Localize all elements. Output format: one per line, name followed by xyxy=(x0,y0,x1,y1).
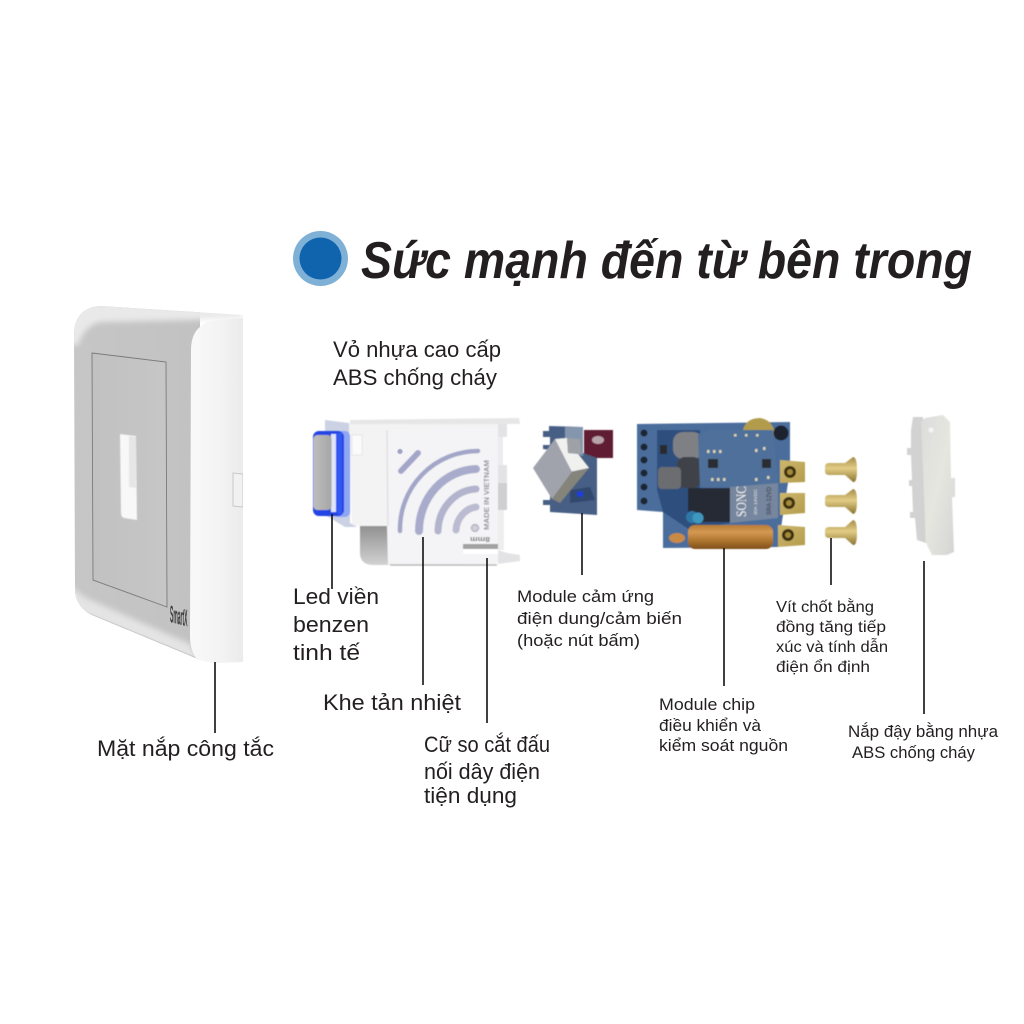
label: LED: Led viền xyxy=(293,584,379,609)
sensor LED xyxy=(577,491,583,497)
label: sensor module xyxy=(517,587,682,650)
panel: blue LED and button xyxy=(313,431,350,517)
side clip xyxy=(233,473,243,507)
plate front face xyxy=(70,300,200,670)
board chips xyxy=(708,459,771,468)
panel: back cover xyxy=(907,415,955,555)
terminals xyxy=(778,460,805,547)
label: chip module: Module chip xyxy=(659,696,755,714)
label: sensor leader line xyxy=(581,513,583,575)
dark components xyxy=(688,488,730,522)
sensor board xyxy=(543,426,597,515)
plate bottom edge xyxy=(82,612,198,660)
label: plate leader line xyxy=(214,662,216,733)
recessed panel xyxy=(92,353,167,607)
label: sensor module: (hoặc nút bấm) xyxy=(517,631,640,650)
housing main body xyxy=(348,424,498,565)
label: back cover xyxy=(848,722,999,762)
relay brand: SONC xyxy=(734,486,750,517)
label: screws: điện ổn định xyxy=(776,658,870,676)
label: vents: Khe tản nhiệt xyxy=(323,690,461,715)
label: LED leader line xyxy=(331,514,333,589)
rocker slot xyxy=(120,434,137,520)
brass screw rear xyxy=(743,418,775,436)
label: LED: tinh tế xyxy=(293,640,360,665)
housing rear clips xyxy=(498,424,520,564)
housing shoulder xyxy=(325,420,357,527)
label: wire gauge: tiện dụng xyxy=(424,783,517,808)
housing top rail xyxy=(350,418,520,426)
label: housing: Vỏ nhựa cao cấp xyxy=(333,337,501,362)
label: back cover: Nắp đậy bằng nhựa xyxy=(848,722,999,741)
label: sensor module: điện dung/cảm biến xyxy=(517,609,682,628)
main PCB xyxy=(637,422,790,548)
board holes xyxy=(640,430,648,504)
plate bottom bevel xyxy=(75,588,196,658)
top daughter board xyxy=(698,430,778,487)
icon: brass screws xyxy=(825,457,857,545)
label: chip leader line xyxy=(723,548,725,686)
plate top bevel xyxy=(74,306,243,346)
label: wire gauge xyxy=(424,732,550,808)
small orange resistor xyxy=(669,533,685,543)
label: wire gauge: nối dây điện xyxy=(424,759,540,784)
relay xyxy=(730,483,778,523)
label: cover leader line xyxy=(923,561,925,714)
label: screws: Vít chốt bằng xyxy=(776,597,874,616)
relay specs: SRA-12VD xyxy=(767,486,773,515)
panel: switch module housing xyxy=(325,418,520,565)
label: gauge leader line xyxy=(486,558,488,723)
copper capacitor xyxy=(688,525,773,549)
icon: wifi vents xyxy=(398,450,478,532)
panel: switch face plate xyxy=(70,300,243,670)
blue ceramic capacitor xyxy=(686,511,698,523)
label: screws: đồng tăng tiếp xyxy=(776,619,886,636)
label: screws xyxy=(776,597,888,676)
label: LED: benzen xyxy=(293,612,369,637)
lower block xyxy=(360,524,390,565)
plate side face xyxy=(190,318,243,670)
label: sensor module: Module cảm ứng xyxy=(517,587,654,606)
label: face plate: Mặt nắp công tắc xyxy=(97,736,274,761)
made in label: MADE IN VIETNAM xyxy=(482,460,491,530)
icon: title bullet xyxy=(293,231,348,286)
label: chip module: điều khiển và xyxy=(659,717,762,735)
sensor cube xyxy=(533,438,589,503)
label: screws: xúc và tính dẫn xyxy=(776,637,888,656)
label: screw leader line xyxy=(830,538,832,585)
panel: control chip module: 30A 14VDC xyxy=(753,488,758,515)
panel: touch sensor module xyxy=(533,426,613,515)
label: chip module: kiểm soát nguồn xyxy=(659,737,788,755)
label: back cover: ABS chống cháy xyxy=(852,744,976,762)
label: housing xyxy=(333,337,501,390)
label: wire gauge: Cữ so cắt đấu xyxy=(424,732,550,757)
capacitors xyxy=(658,432,703,489)
panel: control chip module xyxy=(637,418,805,549)
label: housing: ABS chống cháy xyxy=(333,365,497,390)
label: vents leader line xyxy=(422,537,424,685)
wire gauge slot xyxy=(463,544,498,554)
label: chip module xyxy=(659,696,788,755)
label: LED xyxy=(293,584,379,665)
sensor maroon part xyxy=(584,430,613,458)
8mm mark: 8mm xyxy=(470,535,490,542)
plate brand: SmartX xyxy=(170,600,188,632)
